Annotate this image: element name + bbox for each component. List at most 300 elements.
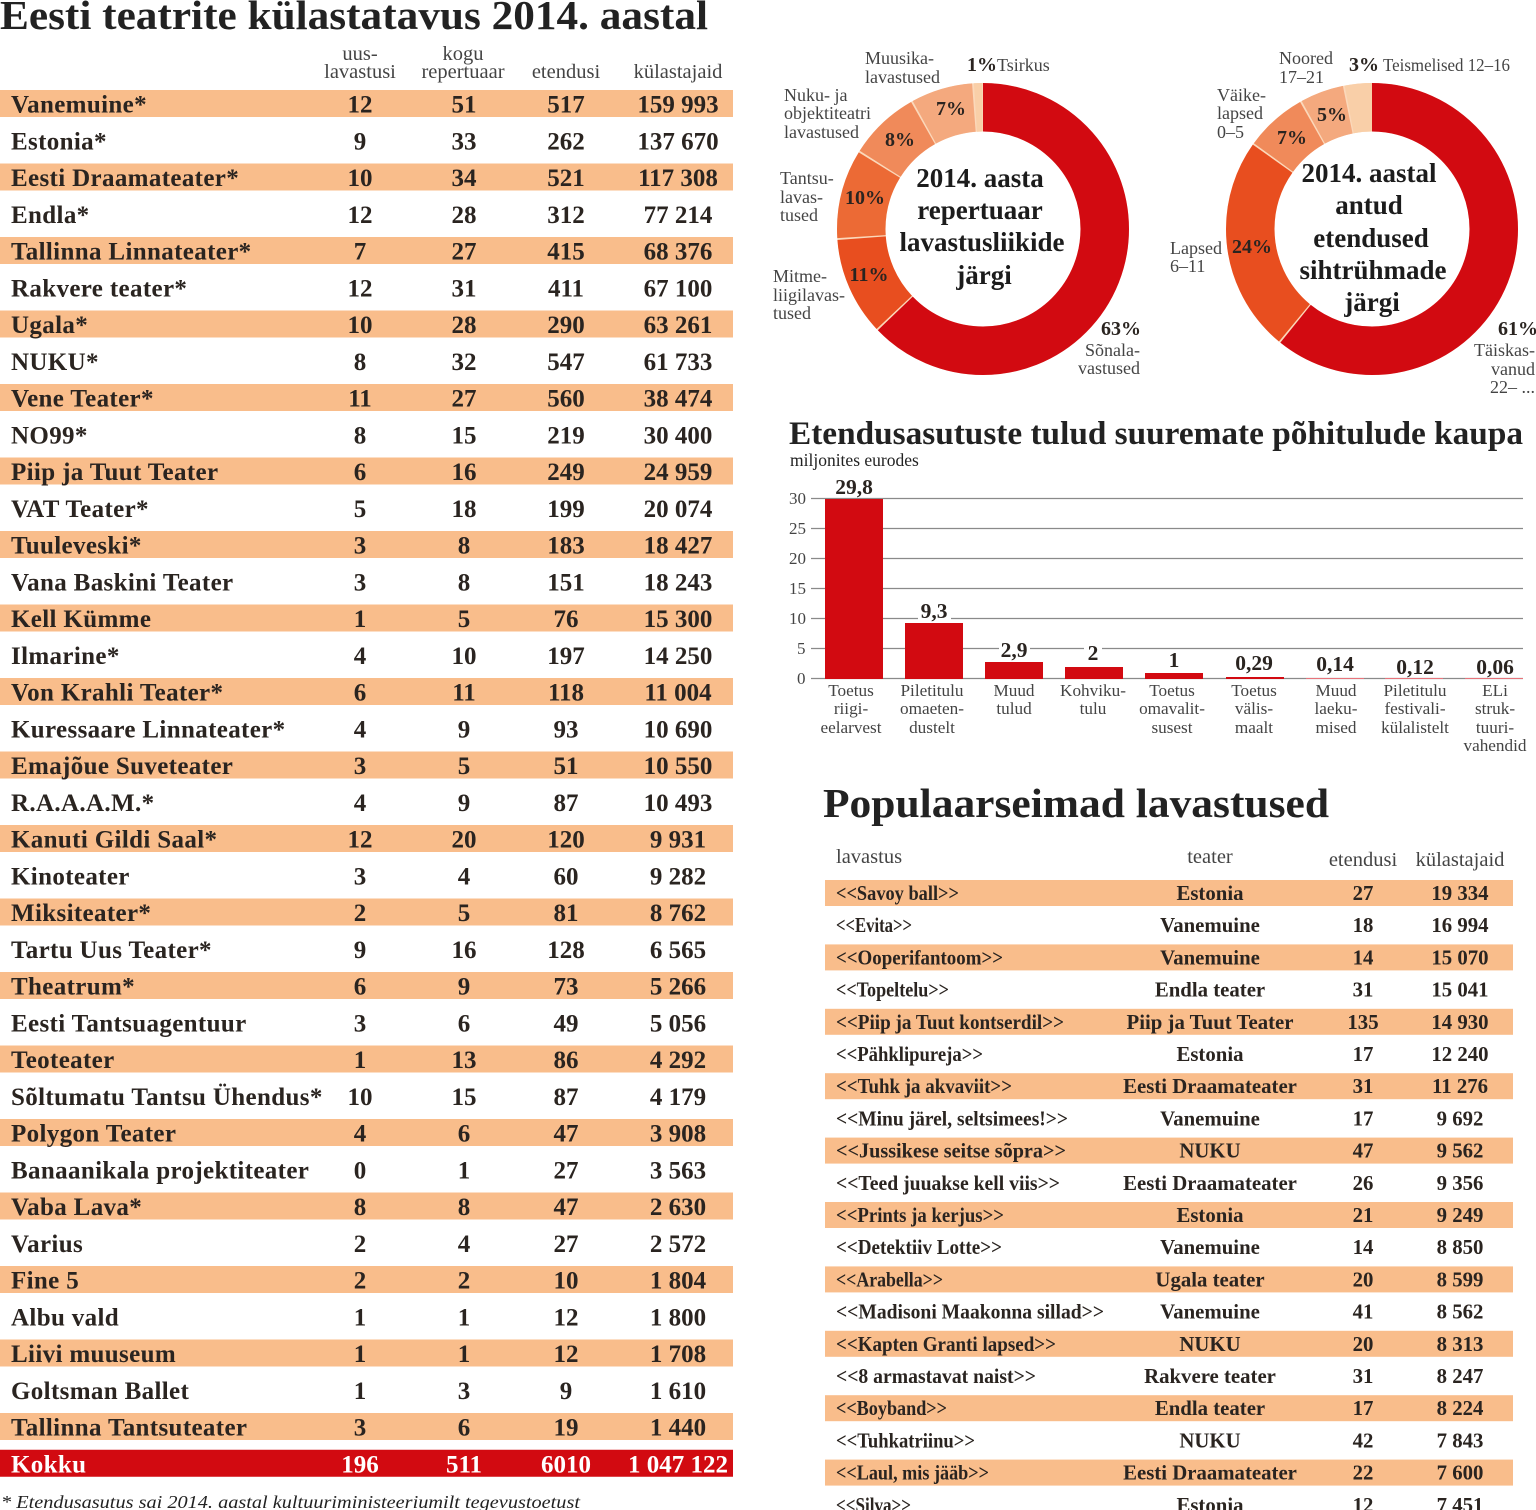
row: NO99: 15 <box>452 422 476 449</box>
row: Boyband: <<Boyband>> <box>836 1397 947 1420</box>
row: Madisoni Maakonna sillad: 8 562 <box>1437 1301 1483 1324</box>
row: Miksiteater: 5 <box>458 900 470 927</box>
row: Arabella <box>825 1266 1513 1292</box>
row: Kanuti Gildi Saal: 120 <box>547 826 585 854</box>
row: Teoteater: 1 <box>354 1047 366 1074</box>
bar category labels: mised <box>1315 718 1357 737</box>
row: Emajõue Suveteater <box>0 752 733 780</box>
y axis labels: 30 <box>789 489 806 508</box>
row: Teoteater: 4 292 <box>650 1047 706 1074</box>
row: Endla: 312 <box>547 202 585 229</box>
row: Tuhk ja akvaviit: Eesti Draamateater <box>1123 1075 1297 1098</box>
row: Von Krahli Teater <box>0 678 733 706</box>
row: Albu vald: Albu vald <box>11 1304 119 1331</box>
row: Kanuti Gildi Saal: 9 931 <box>650 826 706 854</box>
row: Tuhkatriinu: 42 <box>1353 1429 1373 1452</box>
row: Boyband <box>825 1395 1513 1421</box>
row: Sõltumatu Tantsu Ühendus <box>11 1084 706 1111</box>
chart: revenue bars <box>789 475 1527 755</box>
row: Piip ja Tuut kontserdil: Piip ja Tuut Teater <box>1126 1011 1294 1034</box>
row: Miksiteater: 8 762 <box>650 900 706 927</box>
table column headers: etendusi <box>532 61 600 83</box>
row: Pähklipureja: Estonia <box>1176 1043 1244 1066</box>
row: R.A.A.A.M.: R.A.A.A.M.* <box>11 790 154 817</box>
row: Polygon Teater: 47 <box>554 1120 578 1148</box>
row: Jussikese seitse sõpra: NUKU <box>1179 1140 1241 1163</box>
bar category labels: Toetus <box>1149 681 1195 700</box>
donut 1 category labels: objektiteatri <box>784 103 871 123</box>
row: Tuhkatriinu: 7 843 <box>1437 1429 1483 1452</box>
row: Vanemuine: Vanemuine* <box>11 92 147 118</box>
row: Vanemuine: 12 <box>348 92 372 118</box>
donut 2 category labels: vanud <box>1491 359 1535 379</box>
y axis labels <box>789 489 806 688</box>
donut 2 percent values: 3% <box>1349 54 1379 76</box>
donut 2 centre text: 2014. aastal <box>1302 158 1437 188</box>
bar category labels: susest <box>1151 718 1193 737</box>
row: Fine 5: 2 <box>354 1268 366 1294</box>
row: R.A.A.A.M.: 9 <box>458 790 470 817</box>
row: Vaba Lava: 47 <box>554 1194 578 1221</box>
row: Savoy ball: Estonia <box>1176 882 1244 905</box>
row: Kuressaare Linnateater: 9 <box>458 716 470 743</box>
row: Von Krahli Teater: 11 004 <box>644 680 712 706</box>
row: Ugala: Ugala* <box>11 312 88 339</box>
row: Tuuleveski: Tuuleveski* <box>11 532 142 560</box>
row: Goltsman Ballet: 9 <box>560 1378 572 1405</box>
row: Ilmarine: 14 250 <box>644 643 712 670</box>
row: Kell Kümme: Kell Kümme <box>11 606 151 633</box>
y axis labels: 20 <box>789 549 806 568</box>
row: Minu järel, seltsimees!: Vanemuine <box>1160 1107 1260 1130</box>
row: Vaba Lava: 8 <box>458 1194 470 1221</box>
row: VAT Teater: 5 <box>354 496 366 523</box>
row: Banaanikala projektiteater: Banaanikala projektiteater <box>11 1157 309 1184</box>
row: Vaba Lava: Vaba Lava* <box>11 1194 142 1221</box>
donut 1 centre text: repertuaar <box>917 195 1043 225</box>
donut 1 percent values: 1% <box>967 54 997 76</box>
row: Tallinna Linnateater: Tallinna Linnateater* <box>11 238 252 266</box>
row: Theatrum: Theatrum* <box>11 974 135 1000</box>
row: Piip ja Tuut kontserdil <box>825 1009 1513 1035</box>
row: Minu järel, seltsimees!: <<Minu järel, seltsimees!>> <box>836 1107 1068 1130</box>
row: Vana Baskini Teater <box>11 569 712 596</box>
row: Tuhkatriinu: <<Tuhkatriinu>> <box>836 1429 975 1452</box>
row: Arabella: Ugala teater <box>1155 1268 1265 1291</box>
row: Ilmarine: 4 <box>354 643 367 670</box>
donut 1 percent values: 63% <box>1101 318 1141 340</box>
row: Vana Baskini Teater: 8 <box>458 569 470 596</box>
row: Kapten Granti lapsed: 20 <box>1353 1333 1373 1356</box>
row: NUKU: NUKU* <box>11 349 99 376</box>
table column headers: lavastusi <box>324 61 396 83</box>
bar category labels: tulu <box>1080 699 1107 718</box>
row: Piip ja Tuut Teater: 6 <box>354 459 366 486</box>
row: Estonia <box>11 128 719 155</box>
row: Emajõue Suveteater: Emajõue Suveteater <box>11 753 233 780</box>
row: Minu järel, seltsimees!: 17 <box>1353 1107 1373 1130</box>
popular table column headers: teater <box>1187 846 1233 868</box>
row: Piip ja Tuut Teater: Piip ja Tuut Teater <box>11 459 218 486</box>
row: Kinoteater: 9 282 <box>650 863 706 890</box>
row: Evita: 18 <box>1353 914 1373 937</box>
row: VAT Teater: 20 074 <box>644 496 713 523</box>
row: Vene Teater: 11 <box>348 386 372 412</box>
row: Minu järel, seltsimees! <box>836 1107 1483 1130</box>
row: Rakvere teater: Rakvere teater* <box>11 275 187 302</box>
bar category labels: Toetus <box>828 681 874 700</box>
row: Tallinna Linnateater: 7 <box>354 238 366 266</box>
row: Emajõue Suveteater: 5 <box>458 753 470 780</box>
row: Ilmarine: 10 <box>452 643 476 670</box>
row: Sõltumatu Tantsu Ühendus: Sõltumatu Tantsu Ühendus* <box>11 1084 323 1111</box>
bar value labels: 1 <box>1169 648 1179 672</box>
row: Fine 5 <box>0 1266 733 1294</box>
popular table column headers: külastajaid <box>1416 849 1504 871</box>
row: Topeltelu: 31 <box>1353 979 1373 1002</box>
row: Emajõue Suveteater: 10 550 <box>644 753 712 780</box>
bar value labels: 9,3 <box>921 599 948 623</box>
row: Detektiiv Lotte: Vanemuine <box>1160 1236 1260 1259</box>
row: Eesti Draamateater: Eesti Draamateater* <box>11 165 239 192</box>
row: Varius: 2 <box>354 1231 366 1258</box>
row: Prints ja kerjus <box>825 1202 1513 1228</box>
row: Eesti Tantsuagentuur: 49 <box>554 1010 578 1037</box>
row: Tallinna Tantsuteater: 3 <box>354 1414 366 1442</box>
row: Polygon Teater: 4 <box>354 1120 367 1148</box>
donut 2 percent values: 5% <box>1317 104 1347 126</box>
row: Pähklipureja: 17 <box>1353 1043 1373 1066</box>
row: Piip ja Tuut Teater: 24 959 <box>644 459 712 486</box>
row: Tartu Uus Teater: 128 <box>547 937 585 964</box>
bar category labels: Muud <box>993 681 1035 700</box>
row: Piip ja Tuut Teater: 16 <box>452 459 476 486</box>
donut 2 category labels: 17–21 <box>1279 67 1324 87</box>
bar value labels <box>835 475 1514 679</box>
row: Eesti Draamateater: 117 308 <box>638 165 718 192</box>
row: R.A.A.A.M.: 87 <box>554 790 578 817</box>
donut 2 category labels <box>1170 48 1535 397</box>
row: Miksiteater: 81 <box>554 900 578 927</box>
row: Rakvere teater: 411 <box>548 275 584 302</box>
row: Banaanikala projektiteater: 0 <box>354 1157 366 1184</box>
row: Vene Teater: 27 <box>452 386 476 412</box>
bar category labels: välis- <box>1235 699 1273 718</box>
bar category labels: Piletitulu <box>1383 681 1447 700</box>
donut 1 percent values: 11% <box>850 264 888 286</box>
row: Detektiiv Lotte: <<Detektiiv Lotte>> <box>836 1236 1002 1259</box>
row: NUKU: 8 <box>354 349 366 376</box>
bar category labels: dustelt <box>909 718 955 737</box>
row: Tartu Uus Teater: 9 <box>354 937 366 964</box>
row: Kuressaare Linnateater: 4 <box>354 716 367 743</box>
row: Von Krahli Teater: 6 <box>354 680 366 706</box>
bar category labels: eelarvest <box>820 718 882 737</box>
row: Tuhk ja akvaviit: <<Tuhk ja akvaviit>> <box>836 1075 1012 1098</box>
donut 2 category labels: Täiskas- <box>1474 340 1535 360</box>
popular table column headers <box>836 846 1504 871</box>
row: Arabella: 8 599 <box>1437 1268 1483 1291</box>
table column headers <box>324 43 722 83</box>
row: Kinoteater: 4 <box>458 863 471 890</box>
table column headers: kogu <box>442 43 484 65</box>
row: Jussikese seitse sõpra <box>825 1138 1513 1164</box>
y axis labels: 0 <box>797 669 806 688</box>
row: Tallinna Tantsuteater: 19 <box>554 1414 578 1442</box>
row: Theatrum: 73 <box>554 974 578 1000</box>
row: Boyband: 8 224 <box>1437 1397 1484 1420</box>
row: Emajõue Suveteater: 51 <box>554 753 578 780</box>
row: Jussikese seitse sõpra: <<Jussikese seitse sõpra>> <box>836 1140 1066 1163</box>
donut 1 category labels: tused <box>773 303 811 323</box>
row: Vana Baskini Teater: Vana Baskini Teater <box>11 569 233 596</box>
row: Vene Teater <box>0 384 733 412</box>
row: Ooperifantoom: 15 070 <box>1431 946 1489 969</box>
donut 2 percent values: 24% <box>1232 236 1272 258</box>
bar category labels: laeku- <box>1315 699 1358 718</box>
row: Kapten Granti lapsed: <<Kapten Granti lapsed>> <box>836 1333 1056 1356</box>
row: Rakvere teater: 12 <box>348 275 372 302</box>
row: Prints ja kerjus: 21 <box>1353 1204 1373 1227</box>
row: Jussikese seitse sõpra: 47 <box>1353 1140 1373 1163</box>
row: Ooperifantoom: <<Ooperifantoom>> <box>836 946 1003 969</box>
row: Kuressaare Linnateater: Kuressaare Linnateater* <box>11 716 285 743</box>
row: Kinoteater: 3 <box>354 863 366 890</box>
bar category labels: riigi- <box>834 699 868 718</box>
row: Tallinna Tantsuteater: Tallinna Tantsuteater <box>11 1414 247 1442</box>
row: Rakvere teater <box>11 275 712 302</box>
donut 1 percent values: 8% <box>885 129 915 151</box>
row: Teed juuakse kell viis: <<Teed juuakse kell viis>> <box>836 1172 1060 1195</box>
row: Kell Kümme <box>0 604 733 633</box>
row: Liivi muuseum: Liivi muuseum <box>11 1341 176 1368</box>
row: Arabella: <<Arabella>> <box>836 1268 943 1291</box>
row: Madisoni Maakonna sillad: 41 <box>1353 1301 1373 1324</box>
bar category labels: Piletitulu <box>900 681 964 700</box>
row: Sõltumatu Tantsu Ühendus: 4 179 <box>650 1084 706 1111</box>
donut 1 category labels: lavas- <box>780 187 823 207</box>
row: NUKU <box>11 349 712 376</box>
row: Teed juuakse kell viis <box>836 1172 1483 1195</box>
row: Eesti Tantsuagentuur: 6 <box>458 1010 470 1037</box>
row: Tuhkatriinu: NUKU <box>1179 1429 1241 1452</box>
donut 2 category labels: Lapsed <box>1170 238 1222 258</box>
row: Vene Teater: 560 <box>547 386 585 412</box>
row: VAT Teater: VAT Teater* <box>11 496 149 523</box>
bar value labels: 0,14 <box>1316 652 1354 676</box>
row: Endla <box>11 202 713 229</box>
row: Varius: 4 <box>458 1231 471 1258</box>
row: Kokku total <box>0 1450 733 1478</box>
row: Eesti Tantsuagentuur: 5 056 <box>650 1010 706 1037</box>
row: Albu vald: 1 <box>458 1304 470 1331</box>
bar category labels: festivali- <box>1384 699 1446 718</box>
row: Vene Teater: Vene Teater* <box>11 386 154 412</box>
row: Theatrum: 6 <box>354 974 366 1000</box>
bar category labels: omavalit- <box>1139 699 1205 718</box>
row: NO99: 30 400 <box>644 422 712 449</box>
row: Vene Teater: 38 474 <box>644 386 713 412</box>
row: Goltsman Ballet: 1 610 <box>650 1378 706 1405</box>
donut 2 category labels: Teismelised 12–16 <box>1383 55 1510 75</box>
row: Ugala: 290 <box>547 312 585 339</box>
bar category labels: külalistelt <box>1381 718 1449 737</box>
donut 2 category labels: 22– ... <box>1490 377 1535 397</box>
donut 2 category labels: lapsed <box>1217 103 1263 123</box>
donut 1 category labels: Sõnala- <box>1085 340 1140 360</box>
row: Estonia: 33 <box>452 128 476 155</box>
row: Prints ja kerjus: Estonia <box>1176 1204 1244 1227</box>
heading: most popular productions: Populaarseimad lavastused <box>823 780 1329 826</box>
row: Fine 5: 2 <box>458 1268 470 1294</box>
row: Vaba Lava <box>0 1192 733 1221</box>
bar category labels: struk- <box>1475 699 1515 718</box>
row: Laul, mis jääb <box>825 1460 1513 1486</box>
row: Estonia: 9 <box>354 128 366 155</box>
row: 8 armastavat naist: 31 <box>1353 1365 1373 1388</box>
row: Miksiteater <box>0 898 733 927</box>
donut 1 category labels <box>773 48 1140 378</box>
row: Kell Kümme: 5 <box>458 606 470 633</box>
panel: theatre attendance table <box>0 43 733 1478</box>
y axis labels: 15 <box>789 579 806 598</box>
row: VAT Teater: 199 <box>547 496 585 523</box>
donut 2 centre text: antud <box>1335 190 1403 220</box>
row: Boyband: Endla teater <box>1155 1397 1265 1420</box>
row: Varius: 2 572 <box>650 1231 706 1258</box>
row: Tartu Uus Teater <box>11 937 706 964</box>
row: Von Krahli Teater: 11 <box>452 680 476 706</box>
row: Tuuleveski: 18 427 <box>644 532 712 560</box>
row: Evita <box>836 914 1489 937</box>
row: Rakvere teater: 67 100 <box>644 275 712 302</box>
row: Eesti Tantsuagentuur: Eesti Tantsuagentuur <box>11 1010 247 1037</box>
y axis labels: 25 <box>789 519 806 538</box>
row: Endla: Endla* <box>11 202 90 229</box>
row: Liivi muuseum: 1 708 <box>650 1341 706 1368</box>
row: Tallinna Linnateater <box>0 237 733 266</box>
row: Evita: <<Evita>> <box>836 914 912 937</box>
row: Madisoni Maakonna sillad: Vanemuine <box>1160 1301 1260 1324</box>
row: Laul, mis jääb: 7 600 <box>1437 1462 1483 1485</box>
row: Kinoteater: Kinoteater <box>11 863 130 890</box>
row: Von Krahli Teater: 118 <box>548 680 584 706</box>
row: Savoy ball: 19 334 <box>1431 882 1489 905</box>
bar value labels: 0,06 <box>1476 655 1514 679</box>
row: Liivi muuseum: 12 <box>554 1341 578 1368</box>
row: Laul, mis jääb: <<Laul, mis jääb>> <box>836 1462 989 1485</box>
row: VAT Teater: 18 <box>452 496 476 523</box>
donut 2 category labels: Noored <box>1279 48 1333 68</box>
row: Eesti Tantsuagentuur <box>11 1010 706 1037</box>
bar category labels: maalt <box>1235 718 1273 737</box>
row: Kapten Granti lapsed <box>825 1331 1513 1357</box>
row: Detektiiv Lotte: 14 <box>1353 1236 1374 1259</box>
row: Tuhk ja akvaviit <box>825 1073 1513 1099</box>
row: Kokku total: 6010 <box>541 1451 591 1478</box>
row: Varius: 27 <box>554 1231 578 1258</box>
row: Estonia: 262 <box>547 128 585 155</box>
row: Sõltumatu Tantsu Ühendus: 10 <box>348 1084 372 1111</box>
row: Emajõue Suveteater: 3 <box>354 753 366 780</box>
y axis labels: 10 <box>789 609 806 628</box>
row: Tartu Uus Teater: 6 565 <box>650 937 706 964</box>
row: R.A.A.A.M. <box>11 790 712 817</box>
donut 2 centre text: sihtrühmade <box>1299 255 1447 285</box>
donut 2 percent values: 7% <box>1277 127 1307 149</box>
row: Teoteater: 13 <box>452 1047 476 1074</box>
row: Kanuti Gildi Saal: Kanuti Gildi Saal* <box>11 826 217 854</box>
row: Pähklipureja: <<Pähklipureja>> <box>836 1043 983 1066</box>
row: Polygon Teater: 3 908 <box>650 1120 706 1148</box>
row: Polygon Teater: 6 <box>458 1120 470 1148</box>
row: Kinoteater <box>11 863 706 890</box>
row: Endla: 77 214 <box>644 202 713 229</box>
donut 1 category labels: liigilavas- <box>773 285 845 305</box>
row: Banaanikala projektiteater <box>11 1157 706 1184</box>
row: Tuuleveski: 3 <box>354 532 366 560</box>
bar category labels <box>820 681 1527 755</box>
row: Savoy ball: 27 <box>1353 882 1373 905</box>
row: Theatrum: 5 266 <box>650 974 706 1000</box>
row: Kokku total: 196 <box>341 1451 379 1478</box>
bar value labels: 2,9 <box>1001 638 1027 662</box>
row: Fine 5: Fine 5 <box>11 1268 79 1294</box>
row: Evita: Vanemuine <box>1160 914 1260 937</box>
popular table column headers: lavastus <box>836 846 902 868</box>
row: Ugala: 28 <box>452 312 476 339</box>
row: Rakvere teater: 31 <box>452 275 476 302</box>
row: Pähklipureja: 12 240 <box>1431 1043 1489 1066</box>
donut 1 category labels: Tantsu- <box>780 168 834 188</box>
donut 1 category labels: lavastused <box>865 67 940 87</box>
row: Vanemuine: 517 <box>547 92 585 118</box>
row: Miksiteater: Miksiteater* <box>11 900 151 927</box>
row: Piip ja Tuut kontserdil: 14 930 <box>1431 1011 1489 1034</box>
row: Kell Kümme: 1 <box>354 606 366 633</box>
row: Albu vald <box>11 1304 706 1331</box>
row: Vana Baskini Teater: 3 <box>354 569 366 596</box>
row: Kapten Granti lapsed: 8 313 <box>1437 1333 1483 1356</box>
bar value labels: 29,8 <box>835 475 873 499</box>
row: Detektiiv Lotte: 8 850 <box>1437 1236 1483 1259</box>
donut 2 category labels: Väike- <box>1217 85 1266 105</box>
row: Vanemuine: 159 993 <box>637 92 719 118</box>
row: Kell Kümme: 15 300 <box>644 606 712 633</box>
row: Kanuti Gildi Saal: 12 <box>348 826 372 854</box>
row: 8 armastavat naist: <<8 armastavat naist>> <box>836 1365 1036 1388</box>
row: Ugala <box>0 310 733 339</box>
row: Ooperifantoom: 14 <box>1353 946 1374 969</box>
row: Tallinna Tantsuteater: 1 440 <box>650 1414 706 1442</box>
row: Laul, mis jääb: Eesti Draamateater <box>1123 1462 1297 1485</box>
row: Goltsman Ballet <box>11 1378 706 1405</box>
bar category labels: tuuri- <box>1476 718 1514 737</box>
row: Kanuti Gildi Saal: 20 <box>452 826 476 854</box>
row: Ugala: 10 <box>348 312 372 339</box>
row: Teed juuakse kell viis: 9 356 <box>1437 1172 1483 1195</box>
row: Tuuleveski: 183 <box>547 532 585 560</box>
row: Eesti Draamateater: 10 <box>348 165 372 192</box>
row: Albu vald: 12 <box>554 1304 578 1331</box>
row: Kuressaare Linnateater: 93 <box>554 716 578 743</box>
row: Liivi muuseum: 1 <box>354 1341 366 1368</box>
row: Albu vald: 1 800 <box>650 1304 706 1331</box>
row: Tuuleveski: 8 <box>458 532 470 560</box>
row: Tuhk ja akvaviit: 11 276 <box>1432 1075 1488 1098</box>
row: Banaanikala projektiteater: 27 <box>554 1157 578 1184</box>
row: Kokku total: 511 <box>446 1451 482 1478</box>
